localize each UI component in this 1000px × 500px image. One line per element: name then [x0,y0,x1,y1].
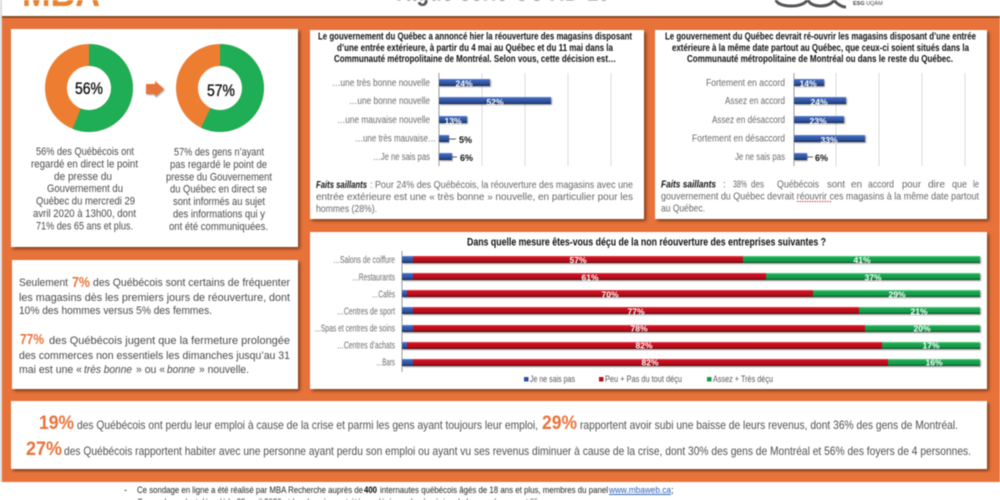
legend: Peu + Pas du tout déçu [605,374,682,385]
faits saillants: des [751,178,764,190]
faits saillants: en [851,178,862,190]
bar chart: 13% [444,116,462,126]
stacked bar chart: 82% [635,340,653,350]
line: 27%: 27% [26,439,62,460]
panel: emploi et revenus [11,401,987,469]
faits saillants: au Québec. [661,202,705,214]
stacked bar chart: 78% [630,324,648,334]
text: 57% des gens [166,146,272,233]
text block: 7% [19,274,290,317]
text: 57% des gens: sont informés au sujet [173,196,265,208]
bar chart: 6% [460,153,473,163]
bar chart: …Je ne sais pas [373,152,430,163]
faits saillants: Faits saillants [661,178,716,190]
text: 56% des Québécois: avril 2020 à 13h00, dont [33,208,136,220]
text: 57% des gens: pas regardé le point de [170,159,267,171]
text block: 7%: des Québécois sont certains de fréquenter [93,277,290,289]
stacked bar chart: 57% [569,255,587,265]
stacked bar chart: 17% [922,340,940,350]
line: 27% [26,439,971,460]
bar chart: Assez en accord [725,96,785,107]
text block: 77%: des Québécois jugent que la fermeture prolongée [49,335,290,347]
stacked bar chart [314,251,980,372]
stacked bar chart: …Salons de coiffure [333,255,395,266]
footer notes: 400 [364,485,377,496]
faits saillants: entrée extérieure est une « très bonne » nouvelle, en particulier pour les [316,191,633,203]
stacked bar chart: …Centres d’achats [337,340,395,352]
bar chart: 6% [815,153,828,163]
text block: 77%: mai est une « [19,364,82,376]
text block: 77%: » nouvelle. [199,364,249,376]
bar: restaurants [402,273,980,280]
donut chart: 57% [187,55,253,121]
legend: Assez + Très déçu [713,374,773,385]
faits saillants: le [973,178,979,190]
text block: 77%: 77% [20,331,44,348]
faits saillants: dire [928,178,945,190]
faits saillants [316,179,633,215]
text: 56% des Québécois: 71% des 65 ans et plus. [36,220,133,232]
text: 56% des Québécois: Québec du mercredi 29 [36,196,135,208]
bar: centres de sport [402,307,980,314]
stacked bar chart: 29% [888,290,906,300]
stacked bar chart: 61% [581,272,599,282]
faits saillants [661,178,979,214]
panel: décision de réouverture [310,30,644,219]
text: 57% des gens: ont été communiquées. [169,221,268,233]
text: 56% des Québécois: regardé en direct le point [31,158,138,170]
stacked bar chart: 41% [853,255,871,265]
bar: cafés [402,290,980,297]
footer notes: Ce sondage en ligne a été réalisé par MBA Recherche auprès de [137,485,363,496]
line: 19% et 29%: 19% [39,413,74,434]
footer notes: www.mbaweb.ca [608,485,672,496]
heading: Le gouvernement du Québec a annoncé hier la réouverture des magasins disposant [318,30,632,42]
heading: Communauté métropolitaine de Montréal. Selon vous, cette décision est… [334,53,616,65]
header logo: ESG UQAM: ESG UQÀM [853,0,883,7]
text: 57% des gens: presse du Gouvernement [166,171,272,183]
faits saillants: Faits saillants [316,179,367,191]
faits saillants: : Pour 24% des Québécois, la réouverture des magasins avec une [370,179,633,191]
stacked bar chart: 77% [627,306,645,316]
footer notes: ; [671,485,674,496]
stacked bar chart: …Bars [376,358,395,368]
text block: 7%: 10% des hommes versus 5% des femmes. [19,305,212,317]
bar: spas [402,325,980,332]
donut chart: 57%: 57% [207,81,235,100]
stacked bar chart: …Centres de sport [337,306,395,318]
stacked bar chart: 16% [925,358,943,368]
text: 56% des Québécois [31,146,138,232]
heading [318,30,632,65]
stacked bar chart: 37% [864,272,882,282]
panel: même date partout [655,30,987,219]
footer notes [124,485,674,500]
stacked bar chart: …Restaurants [352,272,395,284]
bar chart [332,73,611,166]
panel: fréquentation des magasins [12,260,298,389]
stacked bar chart: …Cafés [372,290,395,300]
line: 19% et 29%: 29% [542,413,577,434]
bar chart: 14% [799,78,817,88]
stacked bar chart: 82% [641,358,659,368]
bar chart: Fortement en accord [706,78,785,89]
bar chart: 24% [810,97,828,107]
text: 57% des gens: du Québec en direct se [170,184,267,196]
bar chart: …une très bonne nouvelle [332,78,430,89]
footer notes: - [124,485,127,496]
text block: 7%: les magasins dès les premiers jours de réouverture, dont [19,292,290,304]
text: 57% des gens: des informations qui y [173,208,265,220]
bar chart: 23% [809,116,827,126]
text: 57% des gens: 57% des gens n’ayant [174,146,264,158]
faits saillants: pour [902,178,921,190]
stacked bar chart: 20% [913,324,931,334]
text block: 77%: bonne [167,364,195,376]
bar chart: 52% [486,97,504,107]
line: 19% et 29%: des Québécois ont perdu leur emploi à cause de la crise et parmi les gens ayant toujours leur emploi, [77,418,538,432]
donut chart: 56%: 56% [75,79,103,98]
bar: centres d'achats [402,342,980,349]
bar: salons de coiffure [402,256,980,263]
faits saillants: hommes (28%). [316,203,377,215]
faits saillants: sont [827,178,845,190]
text: 56% des Québécois: 56% des Québécois ont [36,146,134,158]
panel: point de presse [11,29,298,247]
heading [665,30,976,65]
text block: 7%: 7% [72,274,90,291]
arrow [146,81,164,97]
stacked bar chart: 70% [601,290,619,300]
bar chart [692,73,965,166]
text block: 77% [19,331,290,376]
line: 19% et 29% [39,413,958,434]
bar: bars [402,359,980,366]
bar chart: Assez en désaccord [712,115,785,126]
faits saillants: Québécois [777,178,819,190]
legend: Je ne sais pas [530,374,575,385]
bar chart: 5% [459,135,472,145]
text: 56% des Québécois: de presse du [54,171,112,183]
text block: 77%: des commerces non essentiels les dimanches jusqu’au 31 [19,350,290,362]
heading: Dans quelle mesure êtes-vous déçu de la non réouverture des entreprises suivantes ? [467,236,826,248]
text: 56% des Québécois: Gouvernement du [47,183,123,195]
faits saillants: que [952,178,967,190]
legend [524,374,773,385]
bar chart: …une très mauvaise… [355,134,436,144]
text block: 7%: Seulement [19,277,68,289]
faits saillants: : [723,178,726,190]
heading: d’une entrée extérieure, à partir du 4 mai au Québec et du 11 mai dans la [337,42,613,54]
faits saillants: 38% [733,178,747,190]
stacked bar chart: 21% [910,306,928,316]
header logo: ESG UQAM [776,0,883,7]
stacked bar chart: …Spas et centres de soins [314,324,395,334]
text block: 77%: très bonne [84,364,132,376]
panel: déception [310,232,987,389]
bar chart: 24% [455,78,473,88]
bar chart: Fortement en désaccord [692,134,785,144]
faits saillants: accord [868,178,894,190]
footer notes: internautes québécois âgés de 18 ans et plus, membres du panel [380,485,608,496]
bar chart: 33% [820,135,838,145]
bar chart: …une bonne nouvelle [349,96,430,107]
donut chart: 56% [56,55,122,121]
bar chart: Je ne sais pas [735,152,785,163]
text block: 77%: » ou « [136,364,165,376]
bar chart: …une mauvaise nouvelle [337,115,430,126]
